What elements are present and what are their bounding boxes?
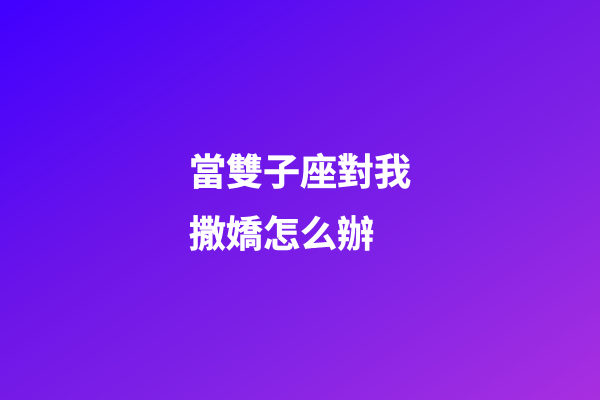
title line 2: 撒嬌怎么辦 [189,214,374,255]
title line 1: 當雙子座對我 [189,152,411,193]
